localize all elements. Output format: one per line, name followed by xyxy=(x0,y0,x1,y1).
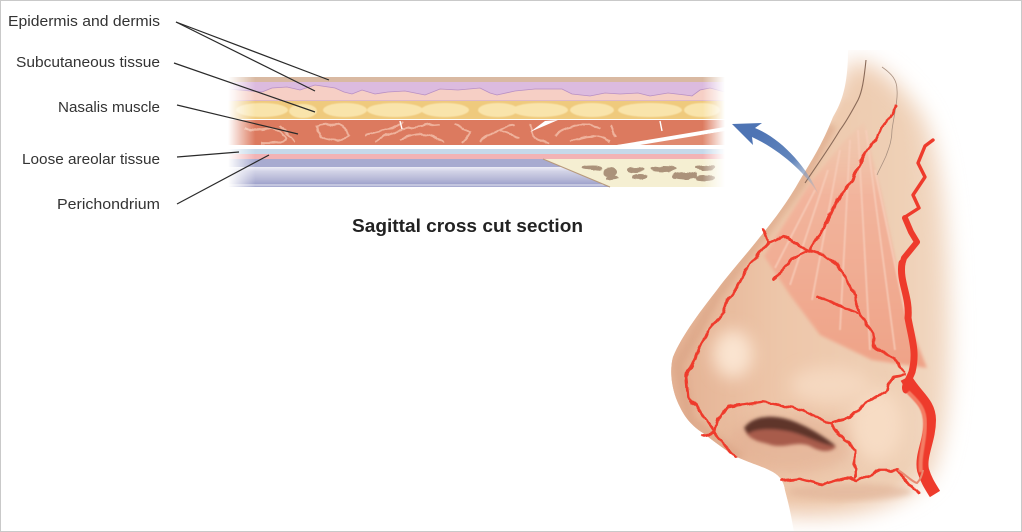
artery: thick angular lower xyxy=(906,378,935,494)
artery: nostril arch xyxy=(715,375,905,433)
highlight: upper nose side xyxy=(790,367,870,403)
leader lines xyxy=(174,22,329,204)
artery: dorsal branch xyxy=(773,107,895,280)
artery: angular upper wavy xyxy=(905,140,933,217)
shadow under nose xyxy=(788,484,912,500)
artery: tip branch xyxy=(686,242,770,456)
muscle streaks xyxy=(245,122,615,144)
label: subcutaneous: Subcutaneous tissue xyxy=(16,54,160,71)
skin solid left body xyxy=(671,120,832,501)
highlight: nose tip xyxy=(713,330,753,378)
artery network xyxy=(686,107,935,494)
artery: cross branch xyxy=(763,230,904,372)
artery: widening wavy section xyxy=(902,218,917,265)
muscle tears xyxy=(400,121,662,131)
bone trabeculae xyxy=(582,165,715,180)
artery: small tip twig xyxy=(703,433,715,435)
white wedge gap xyxy=(617,127,725,145)
layer: dermis purple xyxy=(228,82,725,96)
nostril lower red xyxy=(745,419,836,451)
skin base xyxy=(660,62,950,516)
labels xyxy=(8,13,160,213)
wiggly branches xyxy=(686,107,918,492)
artery: lip branch xyxy=(782,470,918,492)
heading: section caption: Sagittal cross cut section xyxy=(352,216,583,236)
layer: pink dermis wavy xyxy=(228,85,725,101)
white gap xyxy=(262,145,263,146)
artery: thick centre xyxy=(901,263,914,390)
layer: loose areolar tissue xyxy=(228,149,725,154)
label: nasalis: Nasalis muscle xyxy=(58,99,160,116)
skin shading: nostril wing xyxy=(725,417,855,473)
artery: columella loop xyxy=(832,425,855,477)
cartilage band xyxy=(232,167,592,180)
white line xyxy=(228,119,725,121)
nasalis muscle fan xyxy=(764,122,927,368)
artery: inner lighter xyxy=(908,392,925,472)
lateral skin line xyxy=(877,67,897,175)
label: epidermis: Epidermis and dermis xyxy=(8,13,160,30)
nose skin xyxy=(660,62,950,516)
deep muscle fibres xyxy=(640,131,725,145)
cartilage-bone edge xyxy=(543,159,610,187)
label: loose areolar: Loose areolar tissue xyxy=(22,151,160,168)
label: perichondrium: Perichondrium xyxy=(57,196,160,213)
arrow: blue curved xyxy=(732,123,819,195)
highlight: ala xyxy=(851,389,903,461)
illustration: nose xyxy=(660,60,950,516)
layer: nasalis muscle xyxy=(228,120,725,145)
layer: cartilage xyxy=(228,159,610,187)
nostril dark xyxy=(744,417,836,446)
layer: bone xyxy=(543,159,725,187)
nostril xyxy=(744,417,836,451)
fat lobules xyxy=(236,103,720,118)
layer: perichondrium xyxy=(228,154,725,159)
muscle fibres xyxy=(775,130,912,350)
skin shading: left edge xyxy=(678,125,832,458)
panel: sagittal cross section layers xyxy=(228,77,725,187)
dorsal skin line xyxy=(805,60,866,183)
artery: lip connection xyxy=(898,470,923,483)
artery: muscle twig xyxy=(818,297,857,313)
layer: subcutaneous fat xyxy=(228,101,725,119)
layer: epidermis tan band xyxy=(228,77,725,82)
